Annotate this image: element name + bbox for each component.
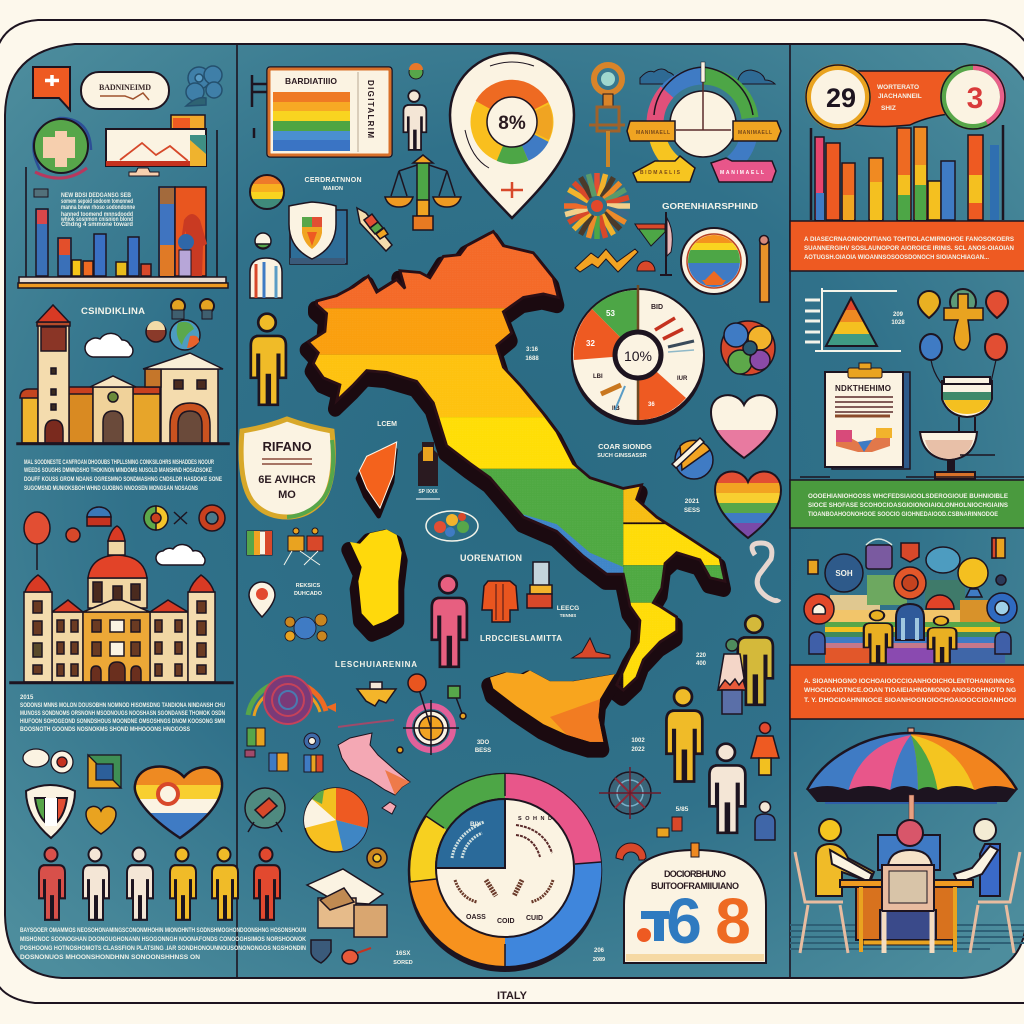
label: year right xyxy=(684,498,700,514)
label: centre heading: CERDRATNNON xyxy=(304,177,362,184)
people and circles scene: SOH xyxy=(835,569,853,578)
label: 1002: 2022 xyxy=(631,747,645,753)
icon: small heart xyxy=(86,806,116,834)
people row xyxy=(39,848,280,920)
icon row: balloon and symbols xyxy=(24,505,225,570)
figures in scene xyxy=(809,604,1011,663)
icon: red speech box xyxy=(33,67,70,110)
text block: footer note: POSHOONG HOTNOSHOMOTS CLASSFION PLATSING .IAR SONDHONOUNNOUSONONONGOS NGSHONDIN xyxy=(20,946,306,952)
orange text banner xyxy=(790,221,1024,271)
monitor with line chart xyxy=(106,115,206,176)
ring diagram with ribbons: BIDMAELIS xyxy=(640,170,681,176)
badge shield: 6E AVIHCR xyxy=(258,474,316,486)
big ring chart: BIY xyxy=(470,821,482,828)
stat card xyxy=(624,843,766,963)
big ring chart: SOHND xyxy=(518,816,552,822)
icon group: speech bubbles xyxy=(23,749,121,788)
label: 3DO: BESS xyxy=(475,748,491,754)
text block: palace: 2015 xyxy=(20,695,34,701)
meeting table with people xyxy=(795,819,1020,953)
orange banner lower xyxy=(790,665,1024,719)
icon: rainbow heart xyxy=(714,470,782,540)
donut chart: 10%: 32 xyxy=(586,339,595,348)
icon: open boxes xyxy=(307,869,387,937)
label: stat left of pie: 3:16 xyxy=(526,347,539,353)
text block: footer note: MISHONOC SOONOGHAN DOONOUGHONANN HSOGONNGH NOONAFONDS CONOOGHSIMOS NORSHOONOK xyxy=(20,937,307,943)
mainland outline xyxy=(308,231,725,690)
figure: yellow person lower xyxy=(666,688,702,782)
icon: striped heart pin xyxy=(134,765,224,840)
icon: striped flag xyxy=(247,531,272,555)
stat card: DOCIORBHUNO xyxy=(664,869,726,879)
panel: right column xyxy=(790,65,1024,953)
text block: building one: SUGOMSND MUNIOKSBOH WHND GUOBNG NNOOSEN MONGSAN NOSAGNS xyxy=(24,486,198,492)
icon: target xyxy=(397,674,466,755)
small pie chart xyxy=(304,788,368,852)
label: 16SX: 16SX xyxy=(396,951,410,957)
label: 1002: 1002 xyxy=(631,738,645,744)
figure: small orange xyxy=(751,722,779,775)
icon: cloud xyxy=(85,333,133,357)
label: stat left of pie: 1688 xyxy=(525,356,539,362)
label: reksics: DUHCADO xyxy=(294,591,323,597)
text block: palace: BOOSNOTH GOONDS NOSNOKMS SHOND MHHOOONS HNOGOSS xyxy=(20,727,190,733)
heading: CSINDIKLINA: CSINDIKLINA xyxy=(81,306,145,317)
small icon circles xyxy=(367,848,387,868)
map pin with percentage: 8% xyxy=(498,113,526,134)
axis and pyramid: 1028 xyxy=(891,320,905,326)
icon: red magnet xyxy=(616,843,646,860)
label: coast: SUCH GINSSASSR xyxy=(597,453,647,459)
text block: chart note: NEW BDSI DEDGANSG SEB xyxy=(61,193,132,199)
panel: left column xyxy=(10,66,307,961)
text block: footer note xyxy=(20,928,307,961)
flag card xyxy=(267,67,392,157)
text block: palace: HIUFOON SOHOGEOND SONNDSHOUS MOONDNE OMSOSHNGS DNOM KOOSONG SMN xyxy=(20,719,225,725)
bar chart: left xyxy=(18,130,228,288)
icon: blue cluster xyxy=(285,614,327,641)
figure: skirted person xyxy=(718,639,746,714)
striped garment xyxy=(250,258,282,298)
label: centre heading xyxy=(304,177,362,192)
small icons: lollipops and globe xyxy=(146,299,214,350)
text block: building one: MAL SOODNESTE CANFROAN DHOOUBS THPLLSNING CONKSILOHRS MSHADDES NOOUR xyxy=(24,460,214,466)
icon: clip xyxy=(752,543,779,601)
green text banner: OOOEHIANIOHOOSS WHCFEDSIAIOOLSDEROGIOUE BUHNIOIBLE xyxy=(808,493,1009,500)
icon: shield card xyxy=(289,202,347,264)
label: lescha: LESCHUIARENINA xyxy=(335,660,417,669)
text block: chart note: whiok sosnmon cnisnion blond xyxy=(60,217,133,223)
icon: small squares xyxy=(245,728,323,772)
badge shield: MO xyxy=(278,489,296,501)
icon: paired figures xyxy=(284,528,323,565)
top stat banner xyxy=(806,65,1005,129)
small ball xyxy=(255,233,271,249)
icon: small ship xyxy=(357,682,396,706)
badge shield xyxy=(241,419,333,517)
label: reksics: REKSICS xyxy=(296,583,321,589)
orange text banner: A DIASECRNAONIOONTIANG TOHTIOLACMIRNOHOE FANOSOKOERS xyxy=(804,236,1015,243)
icon: rainbow circle xyxy=(681,228,747,294)
icon: rainbow arcs xyxy=(248,676,336,724)
icon: shield crest xyxy=(26,785,75,838)
donut chart: 10%: IIB xyxy=(612,406,620,412)
big ring chart: COID xyxy=(497,918,514,925)
floor lines xyxy=(790,925,1024,949)
map pin with percentage xyxy=(450,53,574,218)
orange banner lower: WHOCIOAIOTNCE.OOAN TIOAIEIAHNOMIONO ANOSOOHNOTO NG xyxy=(804,687,1016,694)
balloons and cross xyxy=(918,289,1008,383)
label: 5/85: 5/85 xyxy=(676,806,689,813)
text block: chart note: manna bnew rhoso sodondonne xyxy=(61,205,136,211)
label: 3DO: 3DO xyxy=(477,740,489,746)
top stat banner: 3 xyxy=(967,82,983,115)
stat card: 8 xyxy=(715,885,751,957)
orange banner lower: A. SIOANHOGNO IOCHOAIOOCCIOANHOOICHOLENTOHANGINNOS xyxy=(804,678,1015,685)
illustration: domed palace xyxy=(10,526,233,684)
illustration: tuscan building xyxy=(17,305,229,444)
label: 220 xyxy=(696,653,707,667)
top stat banner: WORTERATO xyxy=(877,84,919,91)
icon: small shield xyxy=(311,940,331,963)
column dividers xyxy=(237,44,790,978)
label: year right: 2021 xyxy=(685,498,700,505)
text block: chart note: hanned toomend mnnsdoodd xyxy=(61,212,133,218)
ring diagram with ribbons: MANIMAELL xyxy=(738,130,772,136)
text block: footer note: DOSNONUOS MHOONSHONDHNN SONOONSHHNSS ON xyxy=(20,955,200,961)
label: leecg xyxy=(557,605,579,618)
icon: pink mini map xyxy=(338,720,410,814)
label: LCEM: LCEM xyxy=(377,421,397,428)
Corsica xyxy=(359,442,397,508)
text block: palace: SODONSI MNNS MOLON DOUSOBHN NOMNOD HISOMSDNG TANDIONA NINDANSH CHU xyxy=(20,703,225,709)
icon: red mound xyxy=(572,638,610,658)
figure: small blue xyxy=(755,802,775,840)
icon: tiny coin xyxy=(409,63,423,79)
clipboard document: NDKTHEHIMO xyxy=(835,384,891,393)
donut chart: 10%: 10% xyxy=(624,348,652,364)
figure: yellow person xyxy=(251,314,286,405)
panel: top centre icons xyxy=(250,53,790,601)
figure: pink person xyxy=(432,576,467,667)
small boxes xyxy=(657,817,682,837)
text block: palace: MUNOSS SONDNOMS ORSNONH MSODNOUGS NOOSHASN SGONDANSE THOMOK OSDN xyxy=(20,711,225,717)
ring diagram with ribbons: MANIMAELL xyxy=(720,170,764,176)
icon: pink heart xyxy=(710,394,778,460)
big ring chart: CUID xyxy=(526,915,543,922)
label: 220: 400 xyxy=(696,661,707,667)
bar chart: right xyxy=(811,125,1003,220)
text block: chart note: Cthdng 4 smmone toward xyxy=(61,222,133,228)
label: 206: 2089 xyxy=(593,957,605,963)
top stat banner: SHIZ xyxy=(881,105,896,112)
stat card: BUITOOFRAMIIUIANO xyxy=(651,881,739,891)
icon: chair xyxy=(527,562,552,608)
label: long label: LRDCCIESLAMITTA xyxy=(480,634,562,643)
icon: paint palette xyxy=(672,438,713,479)
label: reksics xyxy=(294,583,323,597)
label: 16SX: SORED xyxy=(393,960,413,966)
umbrella xyxy=(806,728,1018,820)
label: leecg: LEECG xyxy=(557,605,579,612)
text block: building one: WEEDS SOUGHS DMMNDSHO THOKINON MINDOMS NUSOLD MANSHND HOSADSOKE xyxy=(24,468,212,474)
orange text banner: AOTUGSH.OIAOIA WIOANNSOSOOSDONOCH SIOIANCHIAGAN... xyxy=(804,254,989,261)
icon: small bottle: SP IXXX xyxy=(418,489,438,495)
axis and pyramid xyxy=(805,288,905,351)
icon: crayon xyxy=(357,208,392,251)
donut chart: 10% xyxy=(571,285,705,425)
text block: building one xyxy=(24,460,222,492)
label: stat left of pie xyxy=(525,347,539,362)
text block: palace xyxy=(20,695,225,733)
label: 206 xyxy=(593,948,605,963)
ring diagram with ribbons xyxy=(627,62,781,182)
flag card: DIGITALRIM xyxy=(366,80,375,138)
icon: upright tube xyxy=(760,236,769,302)
people and circles scene xyxy=(804,538,1017,663)
clipboard document xyxy=(825,363,910,469)
icon: small person xyxy=(403,90,426,150)
big ring chart xyxy=(408,774,602,972)
label: 16SX xyxy=(393,951,413,966)
orange text banner: SUANNERGIHV SOSLAUNOPOR AIOROICE IRINIS. SCL ANOS-OIAOIAN xyxy=(804,245,1014,252)
top stat banner: 29 xyxy=(826,83,856,113)
panel: centre labels and small icons xyxy=(241,347,779,1002)
green text banner: TIOANBOAHOONOHOOE SOOCIO GIOHNEDAIOOD.CSBNARINNODOE xyxy=(808,511,999,518)
pill badge xyxy=(81,72,169,109)
stat card: 6 xyxy=(666,885,702,957)
icon: pin small xyxy=(249,582,275,617)
Sicily xyxy=(490,671,615,742)
pill badge: BADNINEIMD xyxy=(99,83,151,92)
label: 220: 220 xyxy=(696,653,707,659)
text block: chart note: somem sepoid sodoom tomonned xyxy=(61,199,133,205)
mainland rainbow bands xyxy=(310,234,724,688)
icon: gold key xyxy=(589,65,625,167)
icon: small bottle xyxy=(416,442,440,499)
donut chart: 10%: LBI xyxy=(593,374,603,380)
text block: chart note xyxy=(60,193,136,228)
axis and pyramid: 209 xyxy=(893,312,904,318)
donut chart: 10%: BID xyxy=(651,304,663,311)
donut chart: 10%: 53 xyxy=(606,309,615,318)
label: centre heading: MAIION xyxy=(323,186,343,192)
icon: cloud two xyxy=(156,545,205,565)
icon: globe badge xyxy=(245,788,285,832)
icon: sunburst xyxy=(564,173,630,239)
hanger bracket xyxy=(252,75,268,138)
label: 1002 xyxy=(631,738,645,753)
icon: colour blob xyxy=(426,511,478,541)
label: 3DO xyxy=(475,740,491,754)
label: UORENATION: UORENATION xyxy=(460,553,522,563)
label: coast xyxy=(597,442,652,459)
text block: footer note: BAYSOOER OMAMMOS NEOSOHONAMINGSCONONMHOHIN MIONOHNTH SODNSHMOGHONDOONSHNG HOSONSHOUN xyxy=(20,928,306,934)
Sardinia xyxy=(350,530,402,626)
figure: mixed colour person xyxy=(738,616,773,705)
label: coast: COAR SIONDG xyxy=(598,442,652,451)
map: Italy xyxy=(290,210,757,750)
flag card: BARDIATIIIO xyxy=(285,76,337,86)
orange banner lower: T. Y. DHOCIOAHNINOCE SIOANHOGNOIOCHOAIOOCCIOANHOOI xyxy=(804,697,1016,704)
label: right heading: GORENHIARSPHIND xyxy=(662,202,758,211)
icon: orange jacket xyxy=(482,581,518,622)
figure: cream person xyxy=(709,744,745,833)
big ring chart: OASS xyxy=(466,914,486,921)
label: 206: 206 xyxy=(594,948,605,954)
footer title: ITALY xyxy=(497,990,528,1002)
green text banner xyxy=(790,480,1024,528)
bowl on stand xyxy=(800,377,1024,479)
icon: compass xyxy=(599,767,661,819)
donut chart: 10%: 36 xyxy=(648,402,655,408)
icon: pennant and zigzag xyxy=(575,212,672,275)
icon: blue gears xyxy=(186,66,222,106)
label: leecg: TENNIS xyxy=(560,613,576,618)
label: year right: SESS xyxy=(684,508,700,514)
ring diagram with ribbons: MANIMAELL xyxy=(636,130,670,136)
icon: swirl xyxy=(721,321,775,375)
map shadow xyxy=(307,239,724,750)
donut chart: 10%: IUR xyxy=(677,376,688,382)
text block: building one: DOUFF KOUSS GROM NDANS OGRESMNO SONDMASHNG CNDSLDR HASDOKE SONE xyxy=(24,477,222,483)
icon: rainbow coin xyxy=(250,175,284,210)
top stat banner: JIACHANNEIL xyxy=(878,93,922,100)
icon: scales xyxy=(385,155,461,230)
green text banner: SIOCE SHOFASE SCOHOCIOASGIOIONOIAIOLONHOLNIOCHGIAINS xyxy=(808,502,1009,509)
icon: key tag xyxy=(342,948,371,964)
icon: green medal xyxy=(33,118,91,178)
badge shield: RIFANO xyxy=(262,439,312,454)
